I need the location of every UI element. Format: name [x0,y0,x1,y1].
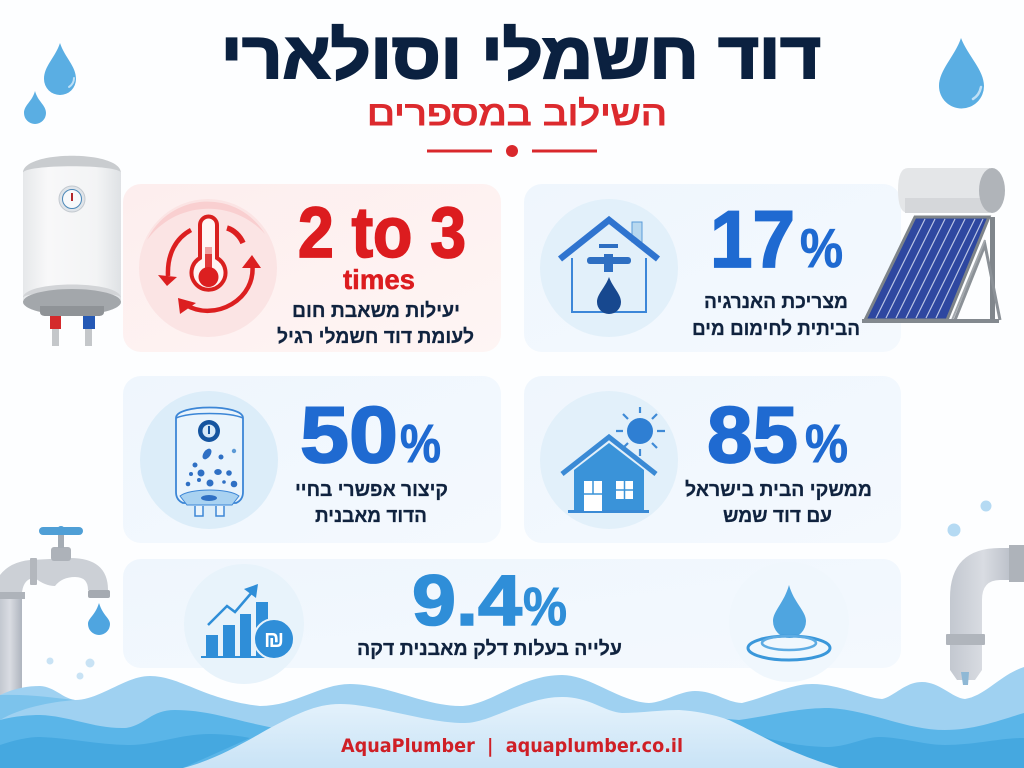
illustration: elbow pipe right [946,545,1024,685]
description: lifespan [295,479,448,527]
illustration: electric boiler [23,156,121,346]
stat: 9.4%: % [523,577,567,637]
icon: water drops top left [24,43,76,124]
stat: 17%: % [800,217,843,279]
stat: 9.4%: 9.4 [412,562,523,641]
stat: 85%: 85 [707,390,798,479]
description: energy use: הביתית לחימום מים [692,318,860,340]
title: דוד חשמלי וסולארי [221,19,821,92]
icon: water drop with ripples [729,562,849,682]
description: energy use: מצריכת האנרגיה [704,291,848,313]
icon: rising chart with shekel [184,564,304,684]
icon: large water drop top right [939,38,984,108]
subtitle: השילוב במספרים [367,95,667,133]
water waves [0,667,1024,768]
footer brand line: AquaPlumber | aquaplumber.co.il [341,735,683,757]
stat: 85%: % [805,414,848,474]
icon: rising chart with shekel: ₪ [264,626,284,652]
stat: 50%: 50 [300,390,398,479]
panel: scale shortens boiler life [123,376,501,543]
illustration: solar water heater [862,168,1005,323]
description: energy use [692,291,860,340]
panel: fuel cost increase [123,559,901,684]
stat: 50%: % [400,414,441,474]
description: heat pump: לעומת דוד חשמלי רגיל [277,326,474,348]
icon: house with tap and drop [540,199,678,337]
panel: heat pump efficiency [123,184,501,352]
icon: thermometer with cycle arrows [139,199,277,337]
stat: 85% [707,390,848,479]
panel: household energy for water heating [524,184,901,352]
stat: 17%: 17 [710,195,795,285]
stat: 2 to 3: 2 to 3 [298,194,466,273]
stat: 17% [710,195,843,285]
description: households: ממשקי הבית בישראל [685,479,872,501]
description: fuel cost: עלייה בעלות דלק מאבנית דקה [357,638,622,660]
stat: 50% [300,390,441,479]
description: heat pump [277,300,474,348]
icon: house with sun [540,391,678,529]
illustration: faucet left [0,526,110,702]
title divider [427,145,597,157]
stat: 9.4% [412,562,567,641]
description: households [685,479,872,527]
description: lifespan: קיצור אפשרי בחיי [295,479,448,501]
icon: falling faucet drop [88,603,110,635]
icon: bubbles left [46,658,94,680]
icon: boiler with limescale [140,391,278,529]
icon: bubbles right [948,500,992,536]
description: lifespan: הדוד מאבנית [315,505,427,527]
panel: households with solar heater [524,376,901,543]
stat unit: times: times [343,264,415,295]
description: households: עם דוד שמש [723,505,832,527]
description: heat pump: יעילות משאבת חום [292,300,460,322]
